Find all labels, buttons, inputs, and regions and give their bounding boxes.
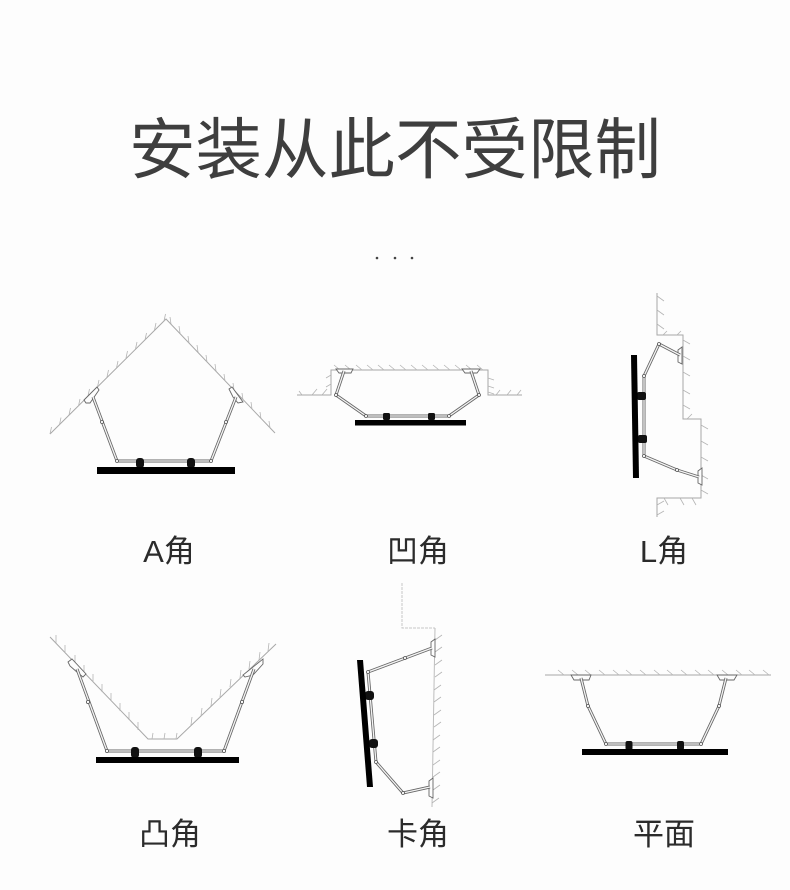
label: recessed angle: 凹角	[387, 534, 449, 569]
label: convex angle: 凸角	[139, 817, 201, 852]
diagram: A angle	[50, 314, 275, 474]
diagram: recessed angle	[297, 365, 522, 426]
diagram: clamp angle	[357, 583, 442, 807]
diagram: flat surface	[545, 670, 771, 755]
label: clamp angle: 卡角	[387, 817, 449, 852]
label: L angle: L角	[640, 534, 688, 569]
diagram: convex angle	[50, 635, 276, 763]
title: 安装从此不受限制	[129, 114, 661, 188]
label: flat surface: 平面	[633, 817, 695, 852]
label: A angle: A角	[143, 534, 195, 569]
diagram: L angle	[631, 293, 708, 517]
three dots separator	[376, 257, 413, 259]
